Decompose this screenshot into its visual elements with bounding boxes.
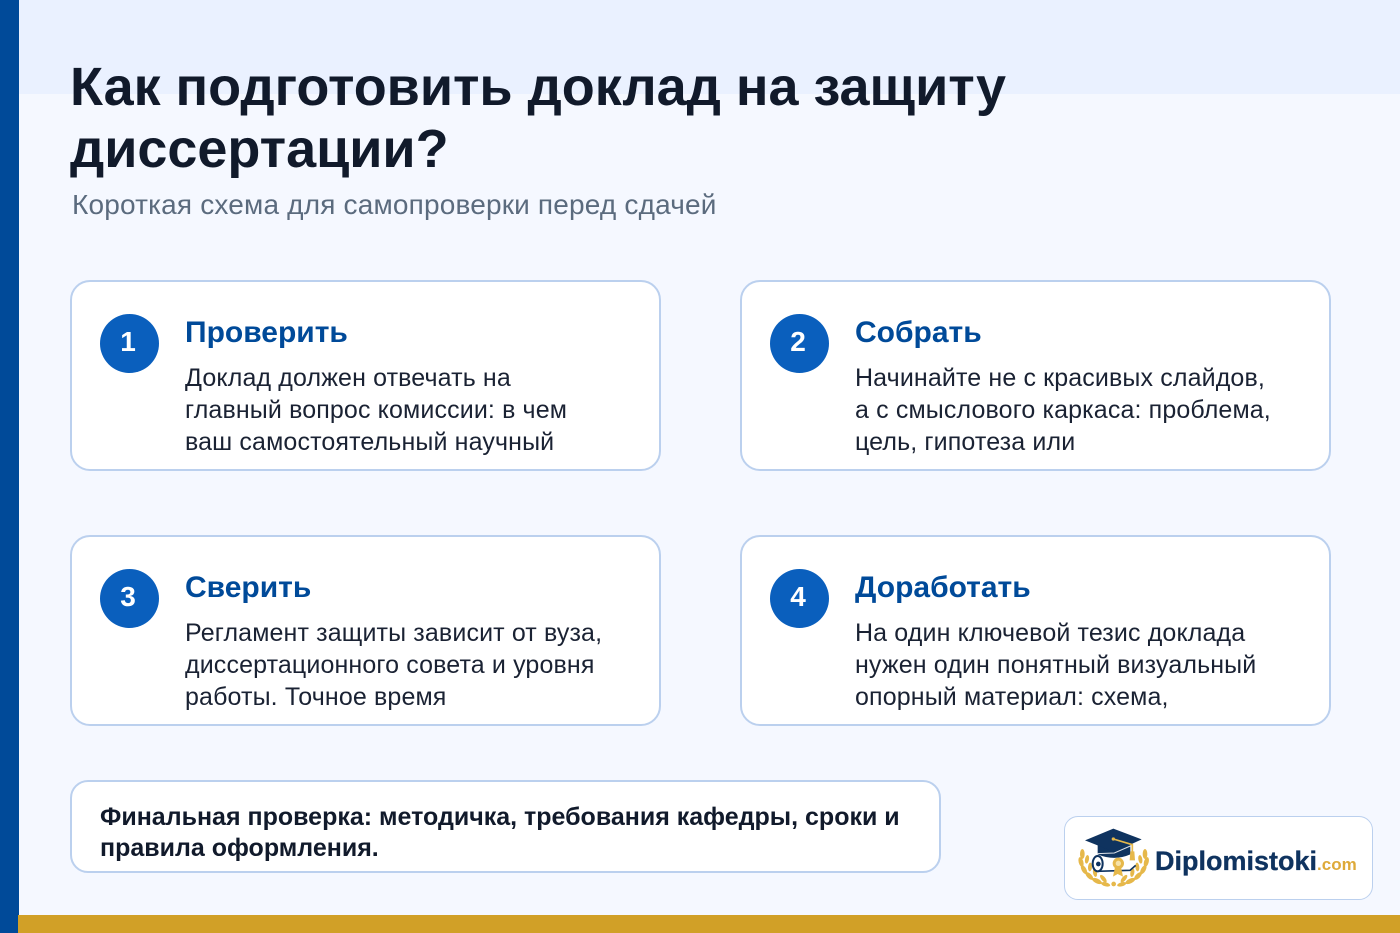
step 1 heading: Проверить xyxy=(185,316,348,349)
final check text: Финальная проверка: методичка, требования кафедры, сроки и xyxy=(100,803,900,831)
step 3 text xyxy=(185,619,602,711)
final check text: правила оформления. xyxy=(100,834,379,862)
step 4 heading: Доработать xyxy=(855,571,1031,604)
step 2 text xyxy=(855,364,1271,456)
title: диссертации? xyxy=(70,119,449,179)
step 3 text: работы. Точное время xyxy=(185,683,446,711)
panel: step 2 xyxy=(740,280,1331,471)
panel: step 3 xyxy=(70,535,661,726)
icon: graduation cap with laurel xyxy=(1078,828,1149,887)
step 3 number: 3 xyxy=(120,581,136,612)
subtitle: Короткая схема для самопроверки перед сдачей xyxy=(72,189,717,220)
step 1 text: ваш самостоятельный научный xyxy=(185,428,554,456)
step 3 number xyxy=(100,569,159,628)
step 2 heading: Собрать xyxy=(855,316,982,349)
step 2 text: а с смыслового каркаса: проблема, xyxy=(855,396,1271,424)
step 3 text: диссертационного совета и уровня xyxy=(185,651,595,679)
step 2 text: цель, гипотеза или xyxy=(855,428,1075,456)
step 1 number xyxy=(100,314,159,373)
step 4 number xyxy=(770,569,829,628)
panel: final check callout xyxy=(70,780,941,873)
step 1 text: главный вопрос комиссии: в чем xyxy=(185,396,567,424)
step 2 number: 2 xyxy=(790,326,806,357)
panel: step 4 xyxy=(740,535,1331,726)
step 2 text: Начинайте не с красивых слайдов, xyxy=(855,364,1265,392)
final check text xyxy=(100,803,900,862)
step 4 text: нужен один понятный визуальный xyxy=(855,651,1256,679)
step 3 heading: Сверить xyxy=(185,571,311,604)
title: Как подготовить доклад на защиту xyxy=(70,57,1006,117)
logo badge xyxy=(1064,816,1373,900)
step 4 text: На один ключевой тезис доклада xyxy=(855,619,1245,647)
left accent bar xyxy=(0,0,19,933)
step 1 number: 1 xyxy=(120,326,136,357)
logo wordmark: Diplomistoki.com xyxy=(1155,846,1357,876)
step 1 text: Доклад должен отвечать на xyxy=(185,364,511,392)
step 4 text: опорный материал: схема, xyxy=(855,683,1169,711)
step 2 number xyxy=(770,314,829,373)
bottom accent bar xyxy=(18,915,1400,933)
step 1 text xyxy=(185,364,567,456)
panel: step 1 xyxy=(70,280,661,471)
step 4 text xyxy=(855,619,1256,711)
step 4 number: 4 xyxy=(790,581,806,612)
top background band xyxy=(19,0,1400,94)
title xyxy=(70,57,1006,179)
step 3 text: Регламент защиты зависит от вуза, xyxy=(185,619,602,647)
